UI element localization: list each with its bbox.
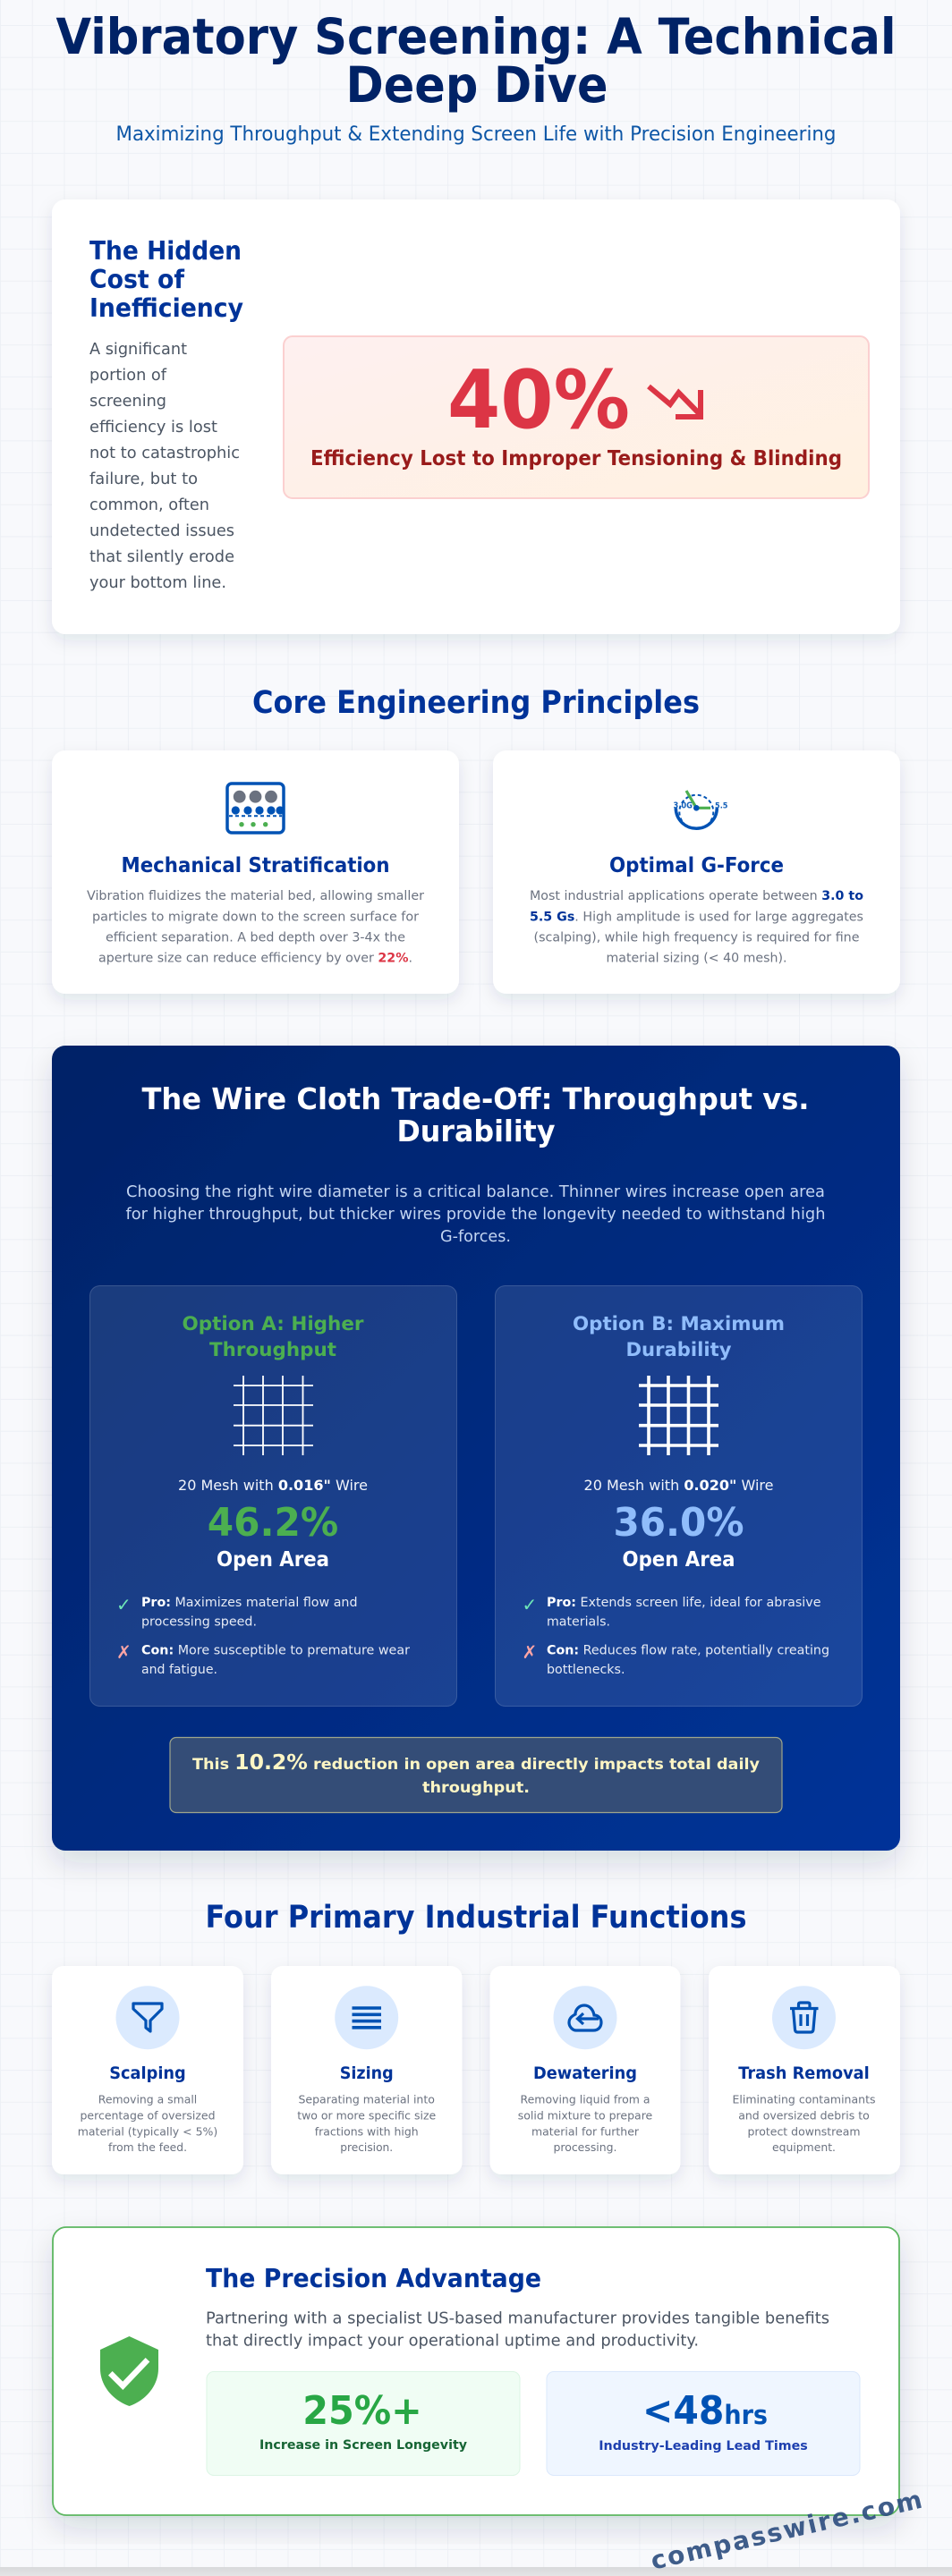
heading: wire cloth trade-off: The Wire Cloth Trade-Off: Throughput vs. [141, 1081, 809, 1116]
icon: sizing bars [335, 1986, 398, 2049]
stat: 25%+: 25%+ [302, 2388, 422, 2434]
heading: hidden cost [89, 236, 243, 323]
text block: trash removal description [732, 2094, 876, 2155]
heading: option B: Durability [626, 1339, 732, 1361]
icon: g-force gauge [673, 791, 728, 828]
panel: hidden cost of inefficiency [52, 199, 900, 634]
icon: g-force gauge: 5.5 [715, 801, 728, 810]
heading: sizing: Sizing [340, 2064, 394, 2083]
panel: wire cloth trade-off [52, 1046, 900, 1851]
list: pros and cons A: Pro: Maximizes material flow and [141, 1596, 358, 1610]
text block: sizing description [297, 2094, 436, 2155]
label: wire spec A: 20 Mesh with 0.016" Wire [178, 1478, 368, 1494]
heading: wire cloth trade-off: Durability [397, 1114, 555, 1148]
heading: hidden cost: Cost of [89, 265, 185, 294]
list: pros and cons A: processing speed. [141, 1615, 257, 1630]
heading: dewatering: Dewatering [533, 2064, 637, 2083]
text block: trash removal description: protect downstream [748, 2125, 861, 2139]
text block: dewatering description: Removing liquid from a [521, 2094, 650, 2107]
list: pros and cons B: bottlenecks. [547, 1663, 625, 1677]
text block: scalping description: Removing a small [98, 2094, 197, 2107]
text block: stratification description: aperture size can reduce efficiency by over 22%. [98, 952, 412, 966]
stat: under 48 hrs: <48hrs [642, 2388, 768, 2434]
label: open area A: Open Area [217, 1548, 329, 1572]
text block: g-force description: material sizing (< 40 mesh). [607, 952, 787, 966]
text block: stratification description: efficient separation. A bed depth over 3-4x the [106, 930, 405, 945]
heading: hidden cost: The Hidden [89, 236, 242, 266]
list: pros and cons B: Con: Reduces flow rate, potentially creating [547, 1643, 829, 1657]
text block: hidden cost description: A significant [89, 340, 187, 359]
text block: sizing description: two or more specific size [297, 2109, 436, 2123]
text block: wire cloth intro [125, 1183, 825, 1246]
title: Vibratory Screening: A Technical [55, 8, 897, 65]
text block: hidden cost description: that silently erode [89, 547, 234, 566]
list: pros and cons A: ✗ [116, 1641, 132, 1663]
text block: dewatering description: processing. [553, 2141, 617, 2155]
list: pros and cons A: and fatigue. [141, 1663, 217, 1677]
icon: thick wire mesh [639, 1376, 718, 1455]
heading: trash removal: Trash Removal [738, 2064, 870, 2083]
text block: hidden cost description [89, 340, 240, 592]
list: pros and cons B: ✗ [523, 1641, 537, 1663]
list: pros and cons B: ✓ [523, 1594, 537, 1615]
stat card: screen longevity [207, 2372, 520, 2476]
label: industry-leading lead times: Industry-Leading Lead Times [599, 2439, 808, 2453]
title [55, 8, 897, 114]
text block: scalping description: percentage of oversized [81, 2109, 215, 2123]
text block: hidden cost description: efficiency is lost [89, 418, 217, 436]
heading: hidden cost: Inefficiency [89, 293, 243, 323]
heading: optimal g-force: Optimal G-Force [609, 854, 784, 877]
list: pros and cons A: Con: More susceptible to premature wear [141, 1643, 410, 1657]
text block: scalping description: from the feed. [108, 2141, 187, 2155]
text block: trash removal description: equipment. [772, 2141, 836, 2155]
heading: four primary industrial functions: Four Primary Industrial Functions [206, 1900, 746, 1936]
panel: optimal g-force [493, 750, 900, 994]
stat card: lead times [547, 2372, 860, 2476]
icon: funnel [116, 1986, 179, 2049]
panel: sizing [271, 1966, 462, 2174]
panel: trash removal [709, 1966, 900, 2174]
list: pros and cons A: ✓ [116, 1594, 132, 1615]
text block: hidden cost description: failure, but to [89, 470, 198, 488]
heading: option A: Throughput [209, 1339, 336, 1361]
text block: dewatering description: solid mixture to prepare [518, 2109, 652, 2123]
heading: option A [183, 1313, 364, 1361]
text block: precision description [206, 2310, 829, 2351]
list: pros and cons B: Pro: Extends screen life, ideal for abrasive [547, 1596, 821, 1610]
text block: wire cloth intro: G-forces. [440, 1228, 511, 1246]
heading: scalping: Scalping [109, 2064, 186, 2083]
text block: scalping description [78, 2094, 217, 2155]
watermark: compasswire.com: compasswire.com [648, 2485, 925, 2576]
text block: g-force description: Most industrial applications operate between 3.0 to [530, 889, 863, 903]
text block: trash removal description: Eliminating contaminants [732, 2094, 876, 2107]
text block: dewatering description [518, 2094, 652, 2155]
title: Deep Dive [345, 56, 608, 114]
callout: open area reduction: throughput. [422, 1779, 530, 1797]
icon: thin wire mesh [234, 1376, 313, 1455]
text block: sizing description: Separating material into [298, 2094, 435, 2107]
icon: cloud with arrow [553, 1986, 617, 2049]
panel: option A [89, 1286, 456, 1707]
text block: hidden cost description: screening [89, 392, 166, 411]
stat: 40%: 40% [447, 353, 630, 447]
panel: scalping [52, 1966, 243, 2174]
text block: hidden cost description: common, often [89, 496, 209, 514]
panel: dewatering [490, 1966, 680, 2174]
text block: wire cloth intro: for higher throughput, but thicker wires provide the longevity needed to withstand high [125, 1206, 825, 1224]
stat: 36.0%: 36.0% [614, 1500, 744, 1546]
icon: stratification screen [227, 784, 285, 833]
text block: precision description: that directly impact your operational uptime and productivity. [206, 2333, 699, 2351]
text block: precision description: Partnering with a specialist US-based manufacturer provides tangible benefits [206, 2310, 829, 2328]
text block: g-force description [530, 889, 863, 966]
text block: hidden cost description: portion of [89, 366, 167, 385]
heading: option A: Option A: Higher [183, 1313, 364, 1335]
callout: 40 percent efficiency lost [284, 336, 869, 498]
heading: option B: Option B: Maximum [573, 1313, 785, 1335]
heading: precision advantage: The Precision Advantage [206, 2264, 541, 2293]
text block: hidden cost description: not to catastrophic [89, 444, 240, 462]
icon: trending down arrow [649, 386, 701, 417]
list: pros and cons B: materials. [547, 1615, 610, 1630]
heading: core engineering principles: Core Engineering Principles [252, 685, 700, 721]
label: wire spec B: 20 Mesh with 0.020" Wire [583, 1478, 774, 1494]
label: open area B: Open Area [623, 1548, 735, 1572]
text block: hidden cost description: undetected issues [89, 521, 234, 540]
panel: mechanical stratification [52, 750, 459, 994]
panel: option B [496, 1286, 863, 1707]
subtitle: Maximizing Throughput & Extending Screen Life with Precision Engineering [116, 123, 836, 146]
icon: g-force gauge: 3.0G [673, 801, 693, 810]
callout: open area reduction [170, 1737, 782, 1812]
stat: 46.2%: 46.2% [208, 1500, 338, 1546]
text block: scalping description: material (typically < 5%) [78, 2125, 217, 2139]
text block: hidden cost description: your bottom line. [89, 573, 226, 592]
text block: wire cloth intro: Choosing the right wire diameter is a critical balance. Thinner wires increase open area [126, 1183, 825, 1201]
icon: trash can [772, 1986, 836, 2049]
text block: stratification description: particles to migrate down to the screen surface for [92, 910, 419, 924]
icon: shield check [100, 2336, 158, 2406]
text block: stratification description [87, 889, 424, 966]
text block: g-force description: 5.5 Gs. High amplitude is used for large aggregates [530, 910, 863, 924]
heading: option B [573, 1313, 785, 1361]
text block: sizing description: precision. [340, 2141, 393, 2155]
text block: g-force description: (scalping), while high frequency is required for fine [533, 930, 859, 945]
text block: sizing description: fractions with high [315, 2125, 419, 2139]
callout label: Efficiency Lost to Improper Tensioning & Blinding [310, 445, 842, 470]
text block: dewatering description: material for further [531, 2125, 640, 2139]
list: pros and cons B [523, 1594, 829, 1677]
heading: mechanical stratification: Mechanical Stratification [122, 854, 390, 877]
text block: trash removal description: and oversized debris to [738, 2109, 870, 2123]
label: increase in screen longevity: Increase in Screen Longevity [259, 2438, 467, 2453]
panel: precision advantage [53, 2227, 899, 2515]
callout: open area reduction: This 10.2% reduction in open area directly impacts total daily [192, 1751, 760, 1775]
text block: stratification description: Vibration fluidizes the material bed, allowing smaller [87, 889, 424, 903]
list: pros and cons A [116, 1594, 410, 1677]
heading: wire cloth trade-off [141, 1081, 809, 1148]
